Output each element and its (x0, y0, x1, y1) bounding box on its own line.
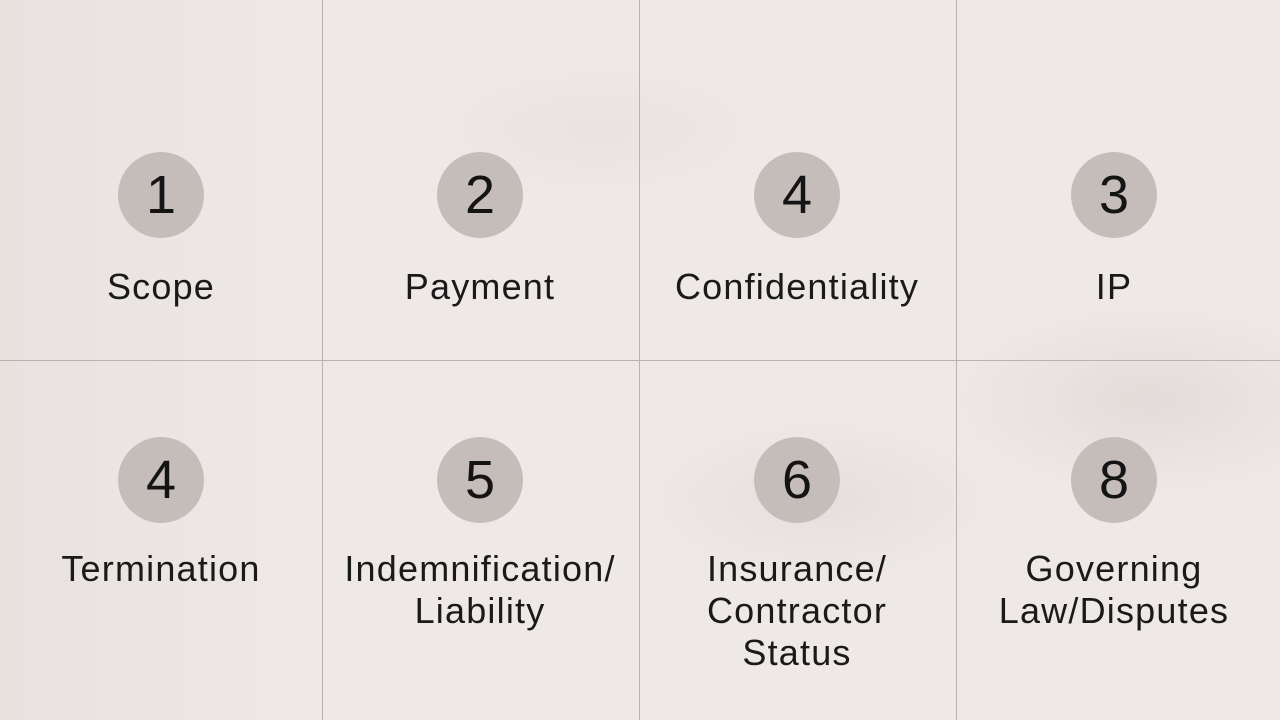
label: governing law/disputes: Law/Disputes (999, 590, 1229, 631)
label: scope: Scope (107, 266, 215, 307)
label: insurance/contractor status: Contractor (707, 590, 887, 631)
icon: number 5: 5 (465, 450, 495, 510)
panel: termination (61, 437, 261, 589)
panel: scope (107, 152, 215, 307)
icon: number 4: 4 (146, 450, 176, 510)
icon: number 8: 8 (1099, 450, 1129, 510)
panel: confidentiality (675, 152, 919, 307)
label: governing law/disputes: Governing (1026, 548, 1202, 589)
label: indemnification/liability: Liability (415, 590, 545, 631)
panel: insurance (707, 437, 887, 673)
label: termination: Termination (61, 548, 261, 589)
icon: number 5 (437, 437, 523, 523)
panel: IP (1071, 152, 1157, 307)
label: payment: Payment (405, 266, 555, 307)
icon: number 4: 4 (782, 165, 812, 225)
icon: number 4 (754, 152, 840, 238)
panel: payment (405, 152, 555, 307)
label: insurance/contractor status: Insurance/ (707, 548, 887, 589)
icon: number 4 (118, 437, 204, 523)
icon: number 2: 2 (465, 165, 495, 225)
icon: number 6 (754, 437, 840, 523)
icon: number 2 (437, 152, 523, 238)
icon: number 3 (1071, 152, 1157, 238)
label: indemnification/liability (344, 548, 616, 631)
icon: number 1: 1 (146, 165, 176, 225)
panel: governing law (999, 437, 1229, 631)
panel: indemnification (344, 437, 616, 631)
label: insurance/contractor status (707, 548, 887, 673)
label: IP: IP (1096, 266, 1132, 307)
label: indemnification/liability: Indemnification/ (344, 548, 616, 589)
label: governing law/disputes (999, 548, 1229, 631)
icon: number 3: 3 (1099, 165, 1129, 225)
icon: number 6: 6 (782, 450, 812, 510)
label: confidentiality: Confidentiality (675, 266, 919, 307)
icon: number 1 (118, 152, 204, 238)
icon: number 8 (1071, 437, 1157, 523)
label: insurance/contractor status: Status (742, 632, 852, 673)
